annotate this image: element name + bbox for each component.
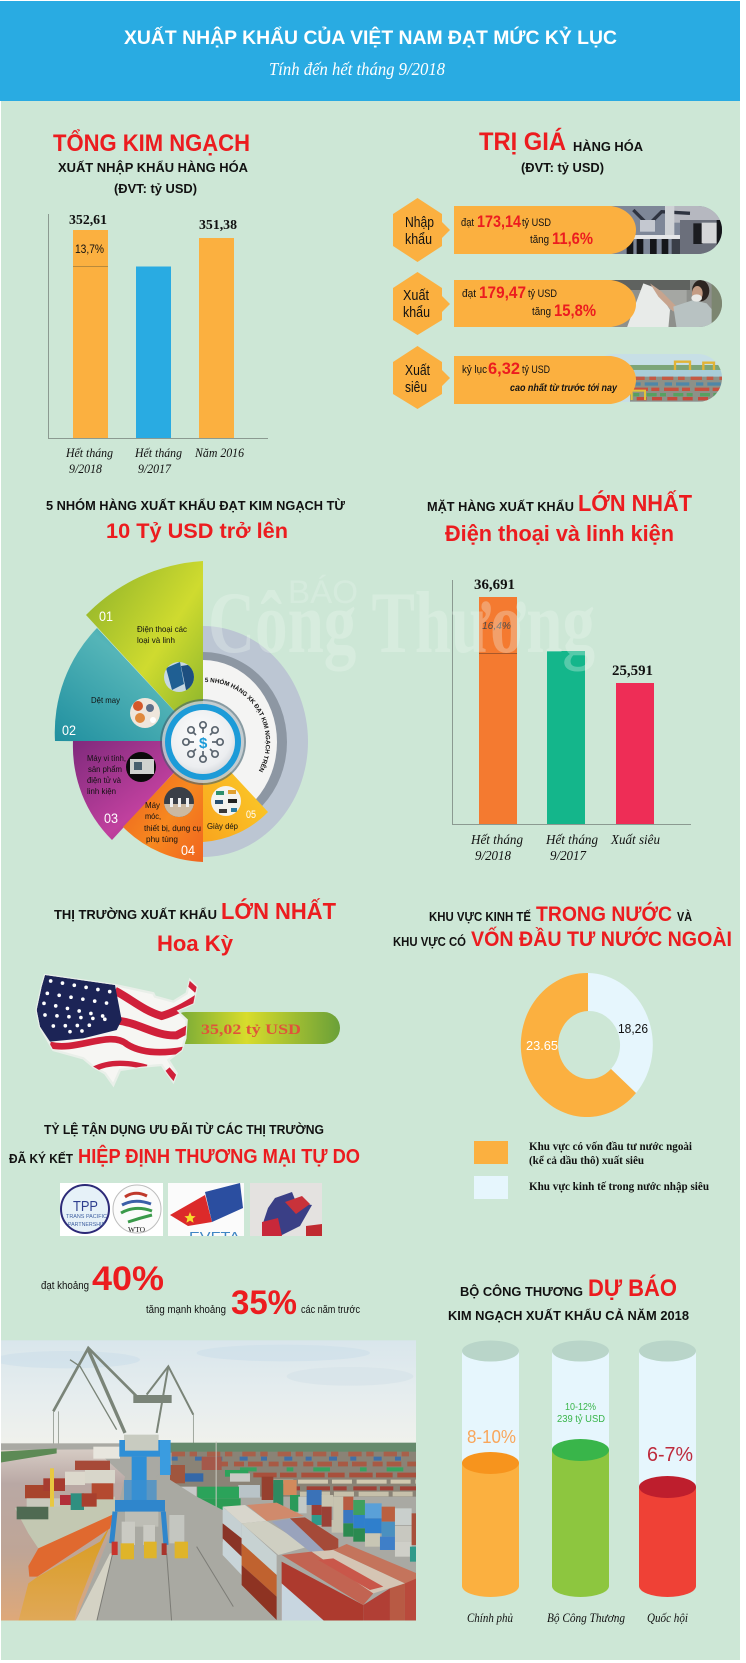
logo: EVFTA: EVFTA: [189, 1229, 240, 1244]
row: exports: 179,47: [479, 283, 526, 302]
row: trade surplus: cao nhất từ trước tới nay: [510, 382, 617, 394]
cylinder: national assembly: Quốc hội: [647, 1610, 688, 1625]
heading: sector donut: VÀ: [677, 909, 692, 924]
logo: trade flags: [250, 1183, 322, 1236]
heading: forecast: [448, 1274, 689, 1323]
thumbnail: machinery: [164, 787, 194, 817]
panel: largest export item: [427, 489, 692, 864]
heading: forecast: BỘ CÔNG THƯƠNG: [460, 1284, 583, 1299]
bar chart: phones: [452, 577, 691, 864]
bar chart: phones: 9/2018: [475, 849, 511, 864]
segment 04: phụ tùng: [146, 834, 178, 844]
heading: goods value: [479, 127, 644, 175]
heading: free trade agreements: TỶ LỆ TẬN DỤNG ƯU ĐÃI TỪ CÁC THỊ TRƯỜNG: [44, 1122, 324, 1137]
bar chart: phones: 25,591: [612, 663, 653, 679]
row: trade surplus: Xuất: [405, 363, 430, 379]
bar chart: phones: 36,691: [474, 577, 515, 593]
heading: largest export item: [427, 489, 692, 546]
near container stacks: [223, 1503, 417, 1622]
cylinder: ministry: 10-12%: [565, 1402, 596, 1413]
heading: five export groups: 10 Tỷ USD trở lên: [106, 519, 288, 543]
heading: largest market: THỊ TRƯỜNG XUẤT KHẨU: [54, 907, 217, 922]
bar chart: total trade: 351,38: [199, 218, 237, 233]
thumbnail: footwear: [211, 786, 241, 816]
right stacks: [262, 1477, 417, 1562]
cylinder: ministry: 239 tỷ USD: [557, 1413, 605, 1425]
watermark: BÁO: [288, 574, 358, 610]
logo: TPP and WTO: PARTNERSHIP: [68, 1222, 105, 1228]
row: imports: đạt: [461, 217, 474, 229]
bar chart: total trade: [48, 213, 268, 476]
segment 02: 02: [62, 722, 76, 738]
segment 04: thiết bị, dụng cụ: [144, 823, 201, 833]
heading: largest export item: Điện thoại và linh kiện: [445, 521, 674, 546]
heading: largest export item: MẶT HÀNG XUẤT KHẨU: [427, 499, 574, 514]
heading: sector donut: KHU VỰC CÓ: [393, 934, 466, 949]
panel: goods value: [393, 127, 723, 409]
row: trade surplus: kỷ lục: [462, 364, 487, 376]
heading: sector donut: TRONG NƯỚC: [536, 902, 672, 926]
stat: 40 percent: 40%: [92, 1260, 164, 1298]
segment 04: 04: [181, 842, 195, 858]
radial wheel chart: [54, 561, 308, 862]
bar chart: total trade: 352,61: [69, 213, 107, 228]
panel: largest export market: [37, 897, 340, 1085]
heading: sector donut: VỐN ĐẦU TƯ NƯỚC NGOÀI: [471, 927, 732, 951]
subtitle: Tính đến hết tháng 9/2018: [269, 59, 445, 79]
logo: EVFTA: [168, 1183, 244, 1236]
row: trade surplus: 6,32: [488, 359, 520, 378]
segment 02: [55, 628, 203, 742]
row: imports: tỷ USD: [522, 217, 551, 229]
heading: total trade: TỔNG KIM NGẠCH: [53, 129, 250, 157]
value pill: [170, 1012, 340, 1044]
sky and crane arms: [1, 1340, 416, 1444]
bar chart: total trade: 9/2018: [69, 461, 102, 476]
segment 05: 05: [246, 809, 256, 821]
heading: free trade agreements: HIỆP ĐỊNH THƯƠNG MẠI TỰ DO: [78, 1144, 360, 1168]
row: imports: [393, 198, 723, 262]
stat: 40 percent: [41, 1260, 164, 1298]
legend: [474, 1140, 710, 1199]
stat: 35 percent: 35%: [231, 1284, 297, 1322]
segment 03: linh kiện: [87, 786, 116, 796]
row: exports: 15,8%: [554, 301, 596, 320]
heading: five export groups: [46, 498, 345, 543]
segment 01: Điện thoại các: [137, 624, 188, 634]
heading: goods value: TRỊ GIÁ: [479, 127, 566, 156]
segment 04: Máy: [145, 800, 161, 810]
bar chart: phones: Xuất siêu: [610, 833, 660, 848]
segment 05: Giày dép: [207, 821, 238, 831]
segment 05: [203, 742, 268, 842]
stat: 40 percent: đạt khoảng: [41, 1280, 89, 1292]
segment 04: móc,: [145, 811, 161, 821]
distant containers: [172, 1452, 417, 1497]
yard trucks: [121, 1512, 188, 1559]
cylinder: government: [462, 1340, 519, 1625]
heading: total trade: [53, 129, 250, 196]
thumbnail: laptop: [126, 752, 156, 782]
heading: largest market: [54, 897, 336, 956]
logo: TPP and WTO: TPP: [73, 1198, 98, 1215]
cylinder: ministry: [547, 1340, 625, 1625]
watermark: Công Thương: [208, 575, 595, 672]
header banner: [0, 1, 740, 101]
row: exports: tăng: [532, 306, 551, 318]
photo: container port: [0, 1340, 417, 1623]
heading: sector donut: KHU VỰC KINH TẾ: [429, 909, 531, 924]
panel: five export groups: [46, 498, 345, 862]
heading: largest market: Hoa Kỳ: [157, 931, 234, 956]
cylinder: national assembly: 6-7%: [647, 1444, 693, 1466]
segment 03: [73, 741, 203, 840]
bar chart: phones: Hết tháng: [470, 833, 523, 848]
panel: total trade: [48, 129, 268, 476]
stat: 35 percent: tăng mạnh khoảng: [146, 1304, 226, 1316]
segment 01: 01: [99, 608, 113, 624]
thumbnail: textiles: [130, 698, 160, 728]
cylinder: government: 8-10%: [467, 1427, 516, 1447]
bar chart: total trade: Hết tháng: [134, 445, 182, 460]
row: imports: 173,14: [477, 212, 521, 231]
legend: Khu vực kinh tế trong nước nhập siêu: [529, 1180, 710, 1193]
heading: free trade agreements: [9, 1122, 360, 1168]
heading: goods value: (ĐVT: tỷ USD): [521, 160, 604, 175]
cylinder: national assembly: [639, 1340, 696, 1625]
bar chart: total trade: 13,7%: [75, 242, 104, 256]
cylinder: ministry: Bộ Công Thương: [547, 1610, 625, 1625]
stat: 35 percent: [146, 1284, 360, 1322]
row: exports: [393, 272, 723, 335]
row: exports: tỷ USD: [528, 288, 557, 300]
heading: largest export item: LỚN NHẤT: [578, 489, 692, 516]
river: [0, 1449, 125, 1622]
segment 03: sản phẩm: [88, 764, 122, 774]
segment 01: [86, 561, 203, 742]
heading: five export groups: 5 NHÓM HÀNG XUẤT KHẨU ĐẠT KIM NGẠCH TỪ: [46, 498, 345, 513]
cylinder: government: Chính phủ: [467, 1610, 513, 1625]
gantry crane: [112, 1440, 171, 1555]
row: imports: khẩu: [405, 232, 432, 248]
row: exports: Xuất: [403, 288, 429, 304]
row: trade surplus: siêu: [405, 380, 427, 396]
row: trade surplus: [393, 346, 723, 409]
segment 02: Dệt may: [91, 695, 121, 705]
value pill: 35,02 tỷ USD: [201, 1022, 301, 1038]
segment 03: 03: [104, 810, 118, 826]
panel: sector donut: [393, 902, 732, 1199]
donut chart: [521, 973, 653, 1117]
heading: largest market: LỚN NHẤT: [221, 897, 336, 924]
donut chart: 23.65: [526, 1038, 558, 1053]
row: imports: tăng: [530, 234, 549, 246]
bar chart: total trade: 9/2017: [138, 461, 171, 476]
heading: forecast: DỰ BÁO: [588, 1274, 677, 1302]
legend: Khu vực có vốn đầu tư nước ngoài: [529, 1140, 693, 1153]
panel: free trade agreements: [9, 1122, 360, 1244]
heading: free trade agreements: ĐÃ KÝ KẾT: [9, 1151, 73, 1166]
segment 03: điện tử và: [87, 775, 121, 785]
panel: forecast: [448, 1274, 696, 1625]
heading: sector donut: [393, 902, 732, 951]
main title: XUẤT NHẬP KHẨU CỦA VIỆT NAM ĐẠT MỨC KỶ LỤC: [124, 25, 617, 49]
bar chart: total trade: Năm 2016: [194, 445, 244, 460]
donut chart: 18,26: [618, 1021, 648, 1036]
row: imports: 11,6%: [552, 229, 593, 248]
logo: TPP and WTO: WTO: [128, 1226, 145, 1234]
hub with dollar icon: $: [199, 735, 208, 752]
ring caption: 5 NHÓM HÀNG XK ĐẠT KIM NGẠCH TRÊN 10 TỶ USD TRỞ LÊN: [205, 678, 270, 772]
heading: goods value: HÀNG HÓA: [573, 139, 644, 154]
logo: TPP and WTO: TRANS PACIFIC: [66, 1214, 107, 1220]
logo: TPP and WTO: [60, 1183, 163, 1236]
heading: forecast: KIM NGẠCH XUẤT KHẨU CẢ NĂM 2018: [448, 1308, 689, 1323]
row: exports: khẩu: [403, 305, 430, 321]
icon: US flag map: [37, 975, 200, 1085]
bar chart: phones: Hết tháng: [545, 833, 598, 848]
heading: total trade: XUẤT NHẬP KHẨU HÀNG HÓA: [58, 160, 249, 175]
thumbnail: phones: [164, 662, 194, 692]
bar chart: phones: 9/2017: [550, 849, 587, 864]
heading: total trade: (ĐVT: tỷ USD): [114, 181, 197, 196]
segment 04: [123, 742, 203, 862]
row: trade surplus: tỷ USD: [522, 364, 550, 376]
mid containers: [170, 1442, 260, 1510]
row: exports: đạt: [462, 288, 476, 300]
legend: (kể cả dầu thô) xuất siêu: [529, 1154, 645, 1167]
quay: [76, 1480, 222, 1620]
bar chart: total trade: Hết tháng: [65, 445, 113, 460]
row: imports: Nhập: [405, 215, 434, 231]
stat: 35 percent: các năm trước: [301, 1304, 360, 1316]
segment 01: loại và linh: [137, 635, 175, 645]
port scene: [0, 1440, 417, 1623]
ship: [15, 1447, 120, 1577]
bar chart: phones: 16,4%: [482, 620, 511, 632]
hub with dollar icon: [160, 699, 246, 785]
segment 03: Máy vi tính,: [87, 753, 126, 763]
